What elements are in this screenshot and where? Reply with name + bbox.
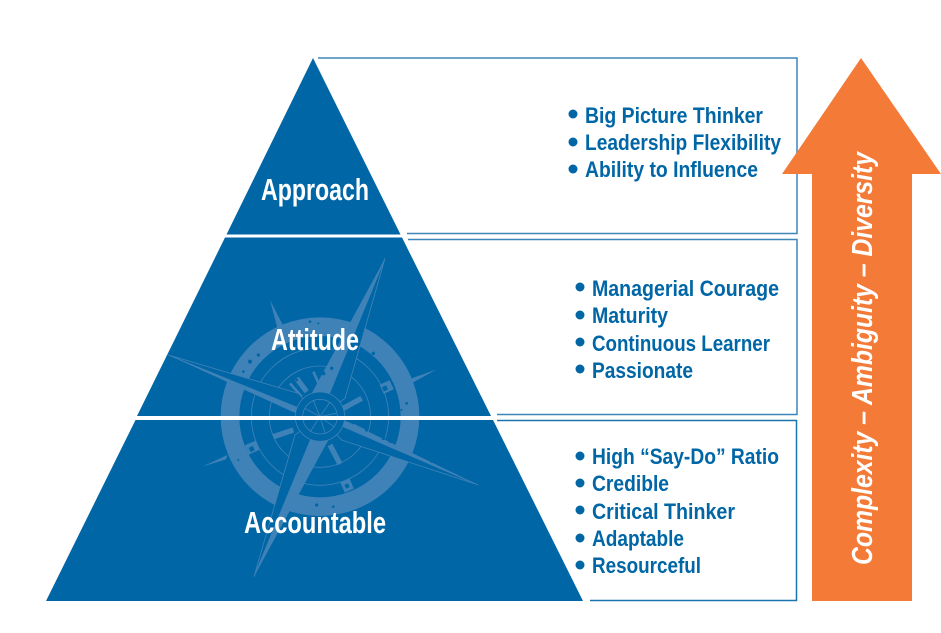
label: Approach: Approach — [261, 173, 369, 207]
needle: east-south-east — [320, 417, 478, 485]
list: approach traits: Big Picture Thinker — [585, 103, 763, 128]
panel: accountable outline — [497, 420, 796, 600]
pyramid tier: accountable — [46, 420, 583, 601]
needle: north-east — [312, 258, 385, 417]
list: accountable traits: Critical Thinker — [592, 499, 735, 524]
distressed speckles — [237, 320, 433, 508]
arrow: increasing complexity — [782, 58, 941, 601]
list: attitude traits: Passionate — [592, 358, 693, 383]
list: attitude traits: Managerial Courage — [592, 276, 779, 301]
label: Attitude: Attitude — [271, 323, 359, 357]
list: attitude traits — [576, 276, 779, 383]
pyramid tier: attitude — [137, 238, 491, 416]
label: Accountable: Accountable — [244, 506, 386, 540]
arrow label: Complexity – Ambiguity – Diversity — [847, 150, 879, 565]
list: accountable traits: Resourceful — [592, 553, 701, 578]
panel: approach outline — [318, 58, 797, 234]
pyramid tier: approach — [226, 58, 400, 234]
list: accountable traits: Adaptable — [592, 526, 684, 551]
list: approach traits — [568, 103, 782, 182]
list: attitude traits: Continuous Learner — [592, 331, 770, 356]
list: approach traits: Ability to Influence — [585, 157, 758, 182]
needle: west-north-west — [168, 355, 320, 417]
list: accountable traits: High “Say-Do” Ratio — [592, 444, 779, 469]
list: accountable traits: Credible — [592, 471, 669, 496]
panel: attitude outline — [408, 240, 797, 414]
list: attitude traits: Maturity — [592, 303, 669, 328]
list: approach traits: Leadership Flexibility — [585, 130, 782, 155]
compass hub — [295, 392, 345, 441]
needle: south-west — [254, 417, 328, 577]
divider between attitude and accountable — [130, 416, 494, 420]
icon: compass rose watermark — [168, 258, 478, 577]
list: accountable traits — [576, 444, 779, 578]
needle: short points — [202, 300, 437, 467]
